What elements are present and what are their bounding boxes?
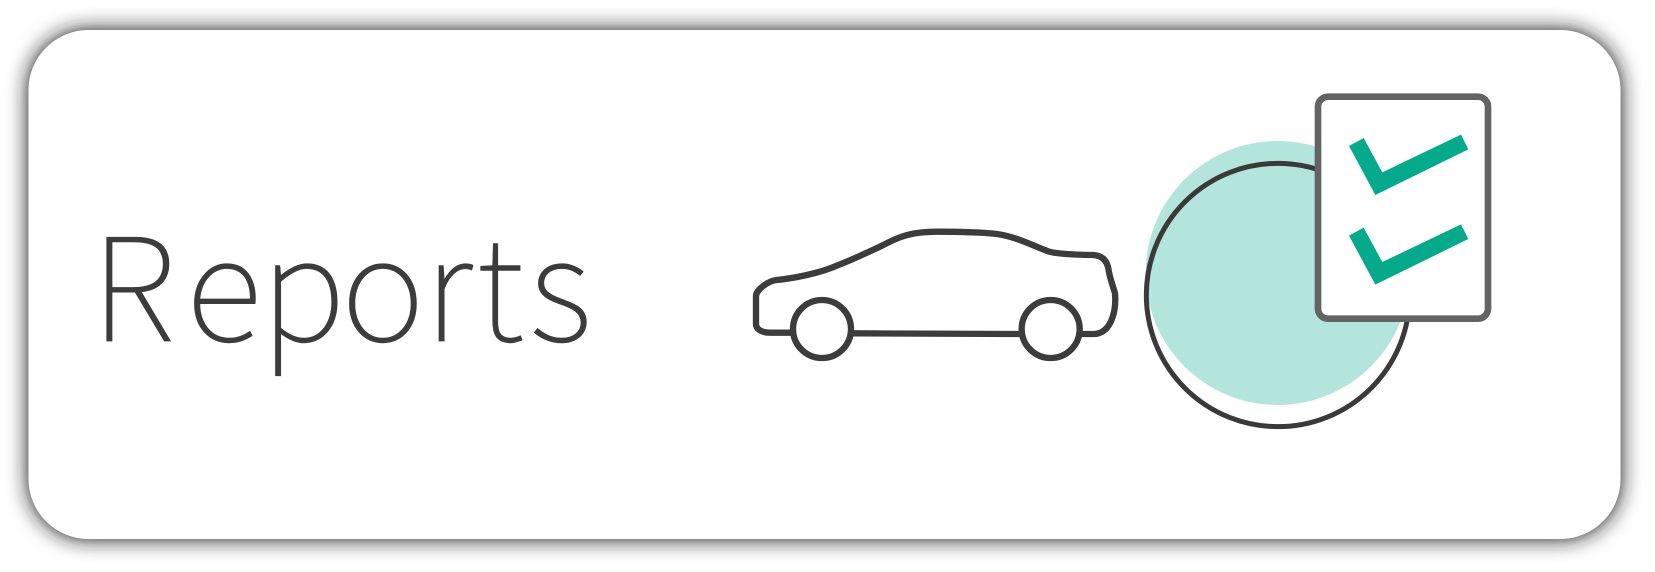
circle outline <box>1146 163 1410 427</box>
car body <box>756 232 1115 334</box>
icon: checklist over circle <box>1146 97 1488 427</box>
first check mark <box>1349 135 1468 195</box>
second check mark <box>1349 224 1468 285</box>
rear wheel <box>1022 300 1080 358</box>
front wheel <box>793 300 851 358</box>
checklist card <box>1318 97 1488 319</box>
teal circle <box>1146 141 1410 405</box>
title: Reports <box>91 176 592 383</box>
icon: car outline <box>756 232 1115 358</box>
